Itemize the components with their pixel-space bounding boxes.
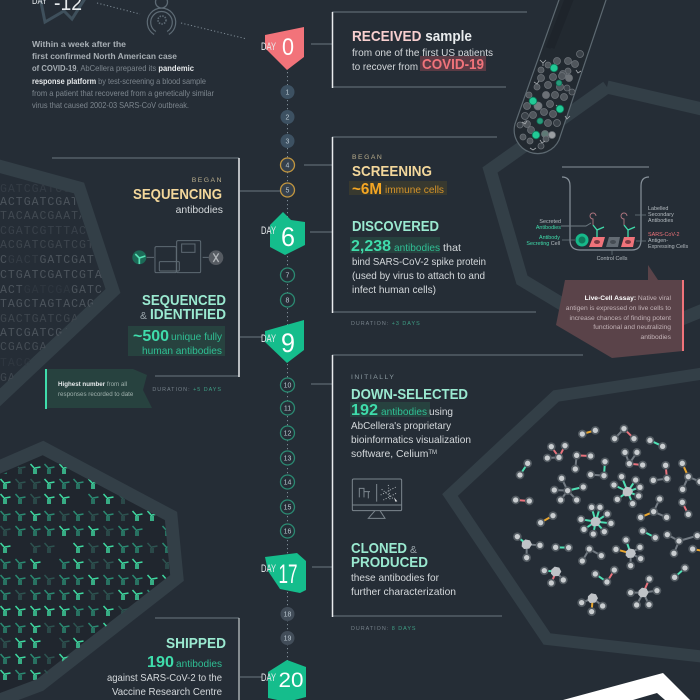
DNA sequence letters: ACTGATCGAGATC [0,284,103,297]
day 20 badge [261,660,306,700]
assay labels right: Antibodies [648,218,673,224]
panel: screening and discovered: DISCOVERED [352,218,439,235]
panel: down-selected and cloned: TM [428,450,437,456]
callout: live-cell assay: functional and neutralizing [593,324,671,331]
panel: received sample: RECEIVED sample [352,28,472,45]
panel: sequencing: IDENTIFIED [150,306,226,323]
panel: down-selected and cloned: further characterization [351,587,456,598]
icon: person with virus [149,0,174,33]
antigen expressing cells [589,237,635,247]
antibody secreting cell [576,234,588,246]
timeline day markers: 7 [286,272,290,280]
DNA sequence letters: GA [0,372,16,385]
DNA sequence letters: ACTGATCGAT [0,196,79,209]
panel: sequencing: unique fully [171,332,223,343]
timeline day markers: 10 [284,382,291,390]
timeline day markers: 5 [286,188,290,194]
panel: down-selected and cloned [332,355,583,632]
assay labels right [562,206,688,262]
callout: live-cell assay: antibodies [640,334,672,341]
text block: intro: of COVID-19, AbCellera prepared its pandemic [32,64,194,73]
white corner shape [563,673,690,700]
panel: received sample [332,12,527,88]
callout: highest number [45,369,152,409]
assay labels right: SARS-CoV-2 [648,232,679,238]
panel: received sample: to recover from [352,62,418,73]
diagram: live-cell assay well [526,167,649,250]
panel: down-selected and cloned: & [410,545,417,556]
bound antibodies [593,225,635,237]
timeline day markers: 16 [284,528,291,536]
dotted arrows from day -12 [97,3,247,39]
panel: down-selected and cloned: DURATION: 8 DAYS [351,626,417,632]
timeline day markers: 19 [284,636,291,642]
timeline day markers: 13 [284,456,291,462]
day 9 badge [261,320,304,363]
panel: shipped [107,618,239,700]
assay labels [526,219,561,247]
timeline day markers: 18 [284,612,291,618]
panel: down-selected and cloned: antibodies [381,407,427,418]
panel: screening and discovered: antibodies [394,243,440,254]
panel: shipped: 190 [147,654,174,671]
panel: sequencing: antibodies [176,205,223,216]
DNA sequence letters [0,183,103,385]
assay labels right: Control Cells [597,256,628,262]
assay labels right: Secondary [648,212,674,218]
network graph: antibody clusters [511,424,700,616]
day 6 badge [261,212,305,255]
assay labels right: Antigen- [648,238,668,244]
timeline day markers: 3 [286,138,290,146]
assay labels right: Expressing Cells [648,244,688,250]
panel: down-selected and cloned: bioinformatics visualization [351,435,471,446]
connector lines [240,44,332,677]
panel: screening and discovered: ~6M [352,181,382,198]
text block: intro: virus that caused 2002-03 SARS-CoV outbreak. [32,101,189,110]
panel: sequencing: human antibodies [142,346,222,357]
panel: sequencing: DURATION: +5 DAYS [152,387,222,393]
panel: down-selected and cloned: 192 [351,402,378,419]
icon: monitor [352,479,402,518]
day 17 badge [261,553,306,593]
DNA sequence letters: TACGA [0,357,40,370]
day 0 badge: 0 [282,34,294,61]
assay labels: Secreting Cell [526,241,560,247]
DNA sequence letters: CGACTGATCGAT [0,254,95,267]
DNA sequence letters: GATCGATCGCT [0,183,87,196]
text block: intro: from a patient that recovered from a genetically similar [32,89,214,98]
timeline day markers: 11 [284,406,291,412]
callout: live-cell assay: antigen is expressed on live cells to [566,305,671,312]
panel: down-selected and cloned: CLONED [351,540,407,557]
callout: live-cell assay: increase chances of finding potent [570,315,671,322]
timeline dotted line [286,68,288,668]
day 0 badge [261,27,304,70]
callout: live-cell assay [556,265,684,358]
hexagon outline: upper right [490,87,700,342]
panel: down-selected and cloned: PRODUCED [351,554,428,571]
hexagon: lower left [0,448,177,700]
panel: shipped: against SARS-CoV-2 to the [107,673,222,684]
DNA sequence letters: CTGATCGATCGTA [0,269,103,282]
panel: screening and discovered: DURATION: +3 DAYS [351,321,421,327]
day 9 badge: DAY [261,333,276,345]
callout: highest number: responses recorded to date [58,391,134,398]
text block: intro: first confirmed North American case [32,52,178,61]
panel: sequencing: BEGAN [192,177,223,184]
panel: shipped: SHIPPED [166,635,226,652]
DNA sequence letters: GACTGATCGA [0,313,79,326]
panel: screening and discovered: bind SARS-CoV-2 spike protein [352,257,486,268]
panel: screening and discovered: BEGAN [352,154,383,161]
panel: screening and discovered: infect human cells) [352,285,436,296]
assay labels: Secreted [539,219,561,225]
hexagon outline: middle right [450,373,700,657]
timeline day markers: 8 [286,298,290,304]
day 0 badge: DAY [261,41,276,53]
timeline day markers: 2 [286,114,290,122]
DNA sequence letters: TAGCTAGTACAG [0,298,95,311]
panel: shipped: Vaccine Research Centre [112,687,222,698]
panel: received sample: from one of the first US patients [352,48,493,59]
panel: screening and discovered: that [443,243,461,254]
panel: screening and discovered: SCREENING [352,163,432,180]
callout: live-cell assay: Live-Cell Assay: Native viral [585,295,672,302]
labelled secondary antibodies [561,213,627,226]
timeline day markers [280,85,294,645]
panel: sequencing: SEQUENCING [133,186,222,203]
panel: screening and discovered: immune cells [385,185,444,196]
text block: intro [32,40,214,110]
panel: sequencing: ~500 [133,328,169,345]
panel: screening and discovered: (used by virus to attach to and [352,271,485,282]
DNA sequence letters: TACAACGAATA [0,210,87,223]
antibody grid [0,464,172,680]
day 6 badge: DAY [261,225,276,237]
day 9 badge: 9 [281,328,295,358]
assay labels right: Labelled [648,206,668,212]
panel: received sample: COVID-19 [422,56,484,73]
hexagon outline: upper left [0,165,113,402]
timeline day markers: 12 [284,430,291,438]
day 20 badge: 20 [278,669,304,692]
DNA sequence letters: ATCGATCGA [0,327,71,340]
panel: sequencing: SEQUENCED [142,292,226,309]
panel: down-selected and cloned: AbCellera's proprietary [351,421,452,432]
assay labels: Antibody [539,235,560,241]
day -12 marker [32,0,86,22]
panel: down-selected and cloned: software, Celium [351,449,428,460]
panel: screening and discovered [332,137,536,327]
day 17 badge: DAY [261,563,276,575]
timeline day markers: 4 [286,162,290,170]
test tube with cells [514,0,607,154]
text block: intro: response platform by test-screening a blood sample [32,77,206,86]
timeline day markers: 14 [284,480,291,486]
panel: down-selected and cloned: these antibodies for [351,573,440,584]
DNA sequence letters: CGATCGTTTAC [0,225,87,238]
day 6 badge: 6 [281,222,295,252]
day 17 badge: 17 [278,559,298,589]
timeline day markers: 15 [284,504,291,512]
text block: intro: Within a week after the [32,40,127,49]
panel: down-selected and cloned: INITIALLY [351,374,395,381]
day 20 badge: DAY [261,672,276,684]
panel: shipped: antibodies [176,659,222,670]
panel: sequencing: & [140,311,147,322]
panel: down-selected and cloned: DOWN-SELECTED [351,386,468,403]
assay labels: Antibodies [536,225,561,231]
panel: down-selected and cloned: using [429,407,453,418]
icon: sequencing instrument [132,241,223,273]
panel: screening and discovered: 2,238 [351,238,391,255]
DNA sequence letters: ACGATCGATCGT [0,239,95,252]
callout: highest number: Highest number from all [58,381,127,388]
panel: sequencing [52,158,239,393]
timeline day markers: 1 [286,90,290,96]
DNA sequence letters: CGACGA [0,341,47,354]
